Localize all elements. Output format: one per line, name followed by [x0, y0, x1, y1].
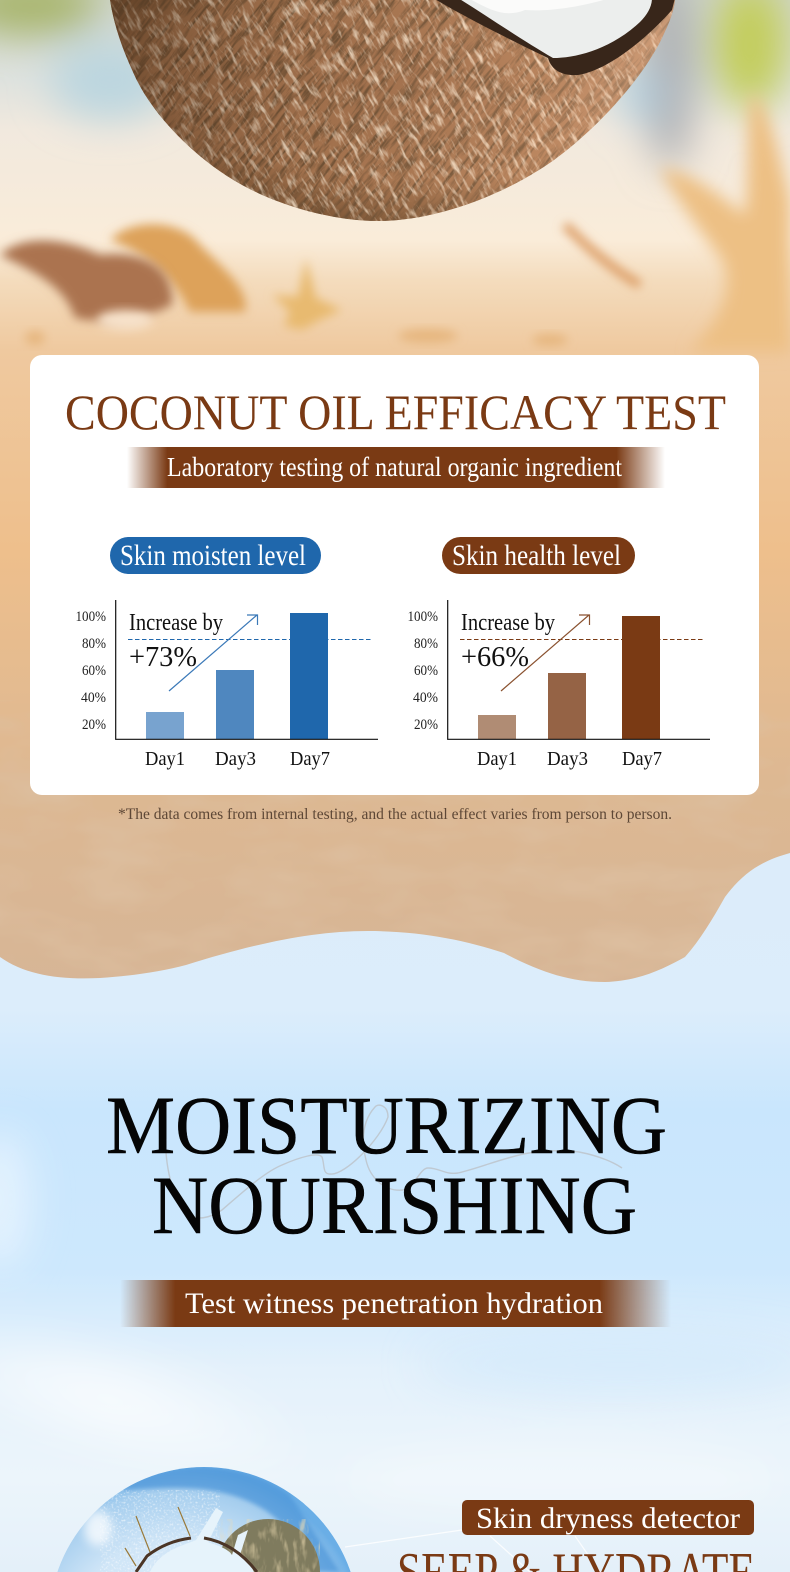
chart: skin health level — [408, 537, 710, 770]
panel: efficacy test card — [30, 355, 759, 795]
y axis labels: 20% — [414, 717, 438, 733]
arrow — [169, 615, 258, 691]
subtitle band: hydration: Test witness penetration hydration — [185, 1287, 603, 1320]
y axis labels — [76, 609, 106, 733]
background: blurred beach scene — [0, 0, 790, 1000]
y axis labels: 60% — [414, 663, 438, 679]
x axis labels: Day7 — [290, 748, 330, 770]
axes — [116, 600, 378, 739]
heading: moisturizing nourishing: NOURISHING — [152, 1159, 637, 1251]
heading: moisturizing nourishing — [106, 1079, 667, 1251]
coconut piece inside sphere — [216, 1519, 320, 1572]
blurred large starfish — [660, 92, 790, 352]
increase callout — [129, 610, 223, 673]
increase callout: Increase by — [461, 610, 555, 636]
blurred shell cluster — [0, 224, 246, 330]
subtitle band: hydration — [120, 1280, 671, 1327]
reference line — [128, 638, 371, 640]
coconut shell rim and white flesh — [433, 0, 675, 75]
increase callout: +73% — [129, 642, 197, 673]
light streaks — [345, 1530, 600, 1572]
reference line — [460, 638, 703, 640]
heading pill: Skin moisten level — [120, 539, 306, 572]
y axis labels: 20% — [82, 717, 106, 733]
y axis labels: 80% — [414, 636, 438, 652]
x axis labels: Day1 — [145, 748, 185, 770]
subtitle band: Laboratory testing of natural organic ingredient — [167, 452, 622, 482]
y axis labels: 100% — [408, 609, 438, 625]
y axis labels: 100% — [76, 609, 106, 625]
bars — [478, 616, 660, 739]
y axis labels: 40% — [413, 690, 438, 706]
increase callout — [461, 610, 555, 673]
x axis labels: Day7 — [622, 748, 662, 770]
heading pill: Skin health level — [452, 539, 621, 572]
blurred small starfish — [272, 258, 342, 330]
footnote: *The data comes from internal testing, and the actual effect varies from person to person. — [118, 806, 672, 823]
increase callout: +66% — [461, 642, 529, 673]
soft sky glows — [0, 1130, 790, 1520]
y axis labels: 80% — [82, 636, 106, 652]
y axis labels: 40% — [81, 690, 106, 706]
y axis labels: 60% — [82, 663, 106, 679]
husk fibers — [125, 1507, 190, 1566]
x axis labels — [145, 748, 330, 770]
tag: skin dryness detector: Skin dryness detector — [476, 1502, 740, 1535]
shell rim — [136, 1538, 257, 1572]
y axis labels — [408, 609, 438, 733]
icon: water sphere with coconut — [49, 1467, 359, 1572]
x axis labels: Day1 — [477, 748, 517, 770]
icon: coconut half — [110, 0, 675, 221]
x axis labels: Day3 — [215, 748, 256, 770]
scribble line — [166, 1105, 622, 1218]
bars — [146, 613, 328, 739]
x axis labels: Day3 — [547, 748, 588, 770]
panel: moisturizing section background with wave edge — [0, 853, 790, 1572]
chart: skin moisten level — [76, 537, 378, 770]
increase callout: Increase by — [129, 610, 223, 636]
milk splash — [150, 1508, 254, 1572]
heading: moisturizing nourishing: MOISTURIZING — [106, 1079, 667, 1171]
x axis labels — [477, 748, 662, 770]
title: COCONUT OIL EFFICACY TEST — [65, 384, 726, 440]
axes — [448, 600, 710, 739]
arrow — [501, 615, 590, 691]
subtitle band — [127, 447, 665, 488]
